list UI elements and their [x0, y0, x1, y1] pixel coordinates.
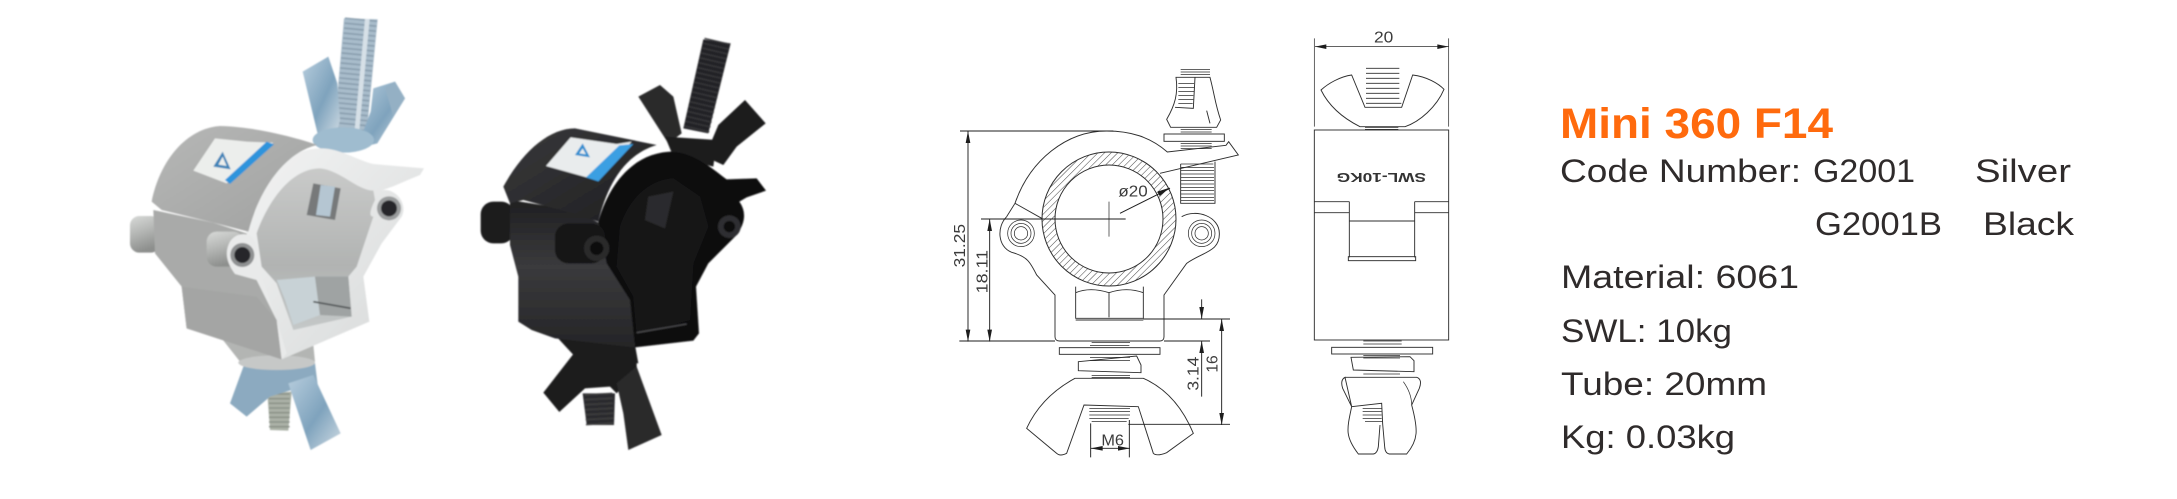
spec: colour silver: Silver	[1975, 153, 2071, 189]
dimension: 20 width: 20	[1374, 30, 1393, 47]
specification panel	[1560, 100, 2075, 455]
dimension: 16: 16	[1205, 355, 1222, 373]
dimension: 16	[1128, 319, 1230, 425]
black clamp: lower wing nut and bolt	[543, 335, 662, 450]
spec: weight: Kg: 0.03kg	[1561, 419, 1735, 455]
front view: pivot bolts	[1008, 220, 1215, 247]
spec: material: Material: 6061	[1561, 259, 1799, 295]
front view: lower wing nut	[1027, 378, 1193, 455]
black clamp: safety label	[546, 137, 633, 181]
dimension: 31.25	[952, 131, 1113, 342]
spec: code number label: Code Number:	[1560, 153, 1801, 189]
dimension: 18.11: 18.11	[975, 250, 992, 293]
silver clamp: safety label	[193, 138, 274, 184]
technical drawing: side view	[1314, 30, 1449, 454]
spec: colour black: Black	[1983, 206, 2075, 242]
front view: clamp outline	[1000, 131, 1238, 341]
dimension: 3.14	[1164, 299, 1210, 397]
silver clamp: top shell	[152, 126, 317, 232]
front view: hatched tube section	[1042, 152, 1176, 286]
black clamp: upper wing nut	[638, 85, 766, 167]
black clamp: inner opening	[617, 178, 708, 333]
front view: upper wing nut and bolt	[1164, 69, 1224, 203]
front view: hex nut	[1076, 287, 1143, 320]
side view: top wing nut	[1321, 68, 1444, 129]
side view: clamp body	[1314, 130, 1449, 340]
silver clamp: front frame and tab	[227, 148, 424, 359]
silver clamp: lug highlight	[227, 234, 287, 359]
side view: lower washers and threads	[1332, 341, 1433, 374]
spec: safe working load: SWL: 10kg	[1561, 313, 1732, 349]
side view: lower wing nut	[1342, 377, 1421, 454]
dimension: M6: M6	[1101, 432, 1124, 449]
photo: silver clamp	[130, 18, 424, 450]
silver clamp: tube opening	[257, 168, 375, 330]
black clamp: top shell	[503, 128, 657, 222]
silver clamp: socket bolts	[230, 196, 401, 267]
silver clamp: upper threaded bolt	[334, 18, 378, 133]
heading: Mini 360 F14: Mini 360 F14	[1560, 100, 1833, 148]
side view: SWL-10KG engraving: SWL-10KG	[1337, 170, 1426, 185]
spec: code G2001: G2001	[1813, 153, 1915, 189]
spec: tube: Tube: 20mm	[1561, 366, 1767, 402]
silver clamp: hinge body and lower block	[130, 210, 282, 359]
black clamp: front frame and tab	[598, 152, 766, 347]
silver clamp: lower wing nut and bolt	[222, 338, 341, 450]
photo: black clamp	[481, 39, 766, 450]
technical drawing: front view	[952, 69, 1238, 457]
dimension: M6	[1091, 420, 1130, 457]
dimension: 3.14: 3.14	[1185, 357, 1202, 391]
dimension: 18.11	[975, 219, 1126, 342]
silver clamp: upper wing nut	[303, 57, 405, 153]
spec: code G2001B: G2001B	[1815, 206, 1942, 242]
dimension: 31.25: 31.25	[952, 224, 969, 267]
front view: lower washers and threads	[1059, 343, 1160, 377]
dimension: 20 width	[1314, 30, 1449, 127]
black clamp: hinge body and lower block	[481, 200, 635, 347]
dimension: ø20: ø20	[1118, 184, 1148, 201]
black clamp: upper threaded bolt	[683, 39, 731, 133]
silver clamp: hex bolt in lower window	[277, 277, 352, 325]
black clamp: hinge barrel and socket bolts	[555, 215, 741, 263]
dimension: ø20	[1118, 184, 1170, 213]
silver clamp: bolt shank in slot	[307, 183, 341, 220]
